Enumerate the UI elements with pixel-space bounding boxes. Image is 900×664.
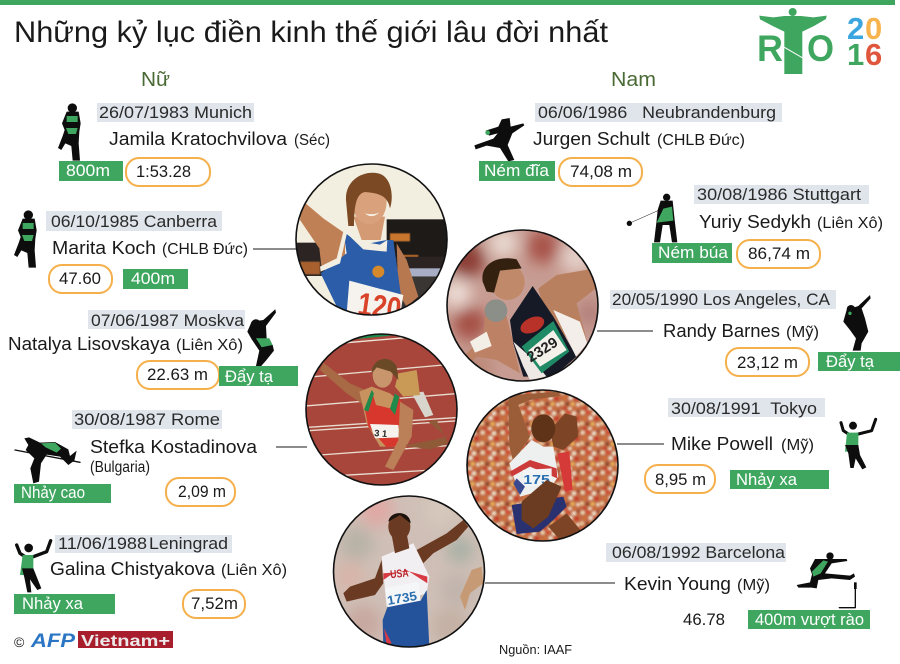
record: Mike Powell: (Mỹ): [781, 437, 814, 454]
letter O: O: [807, 28, 834, 69]
name: Natalya Lisovskaya: [8, 333, 171, 354]
date: [606, 543, 786, 562]
year 20: 0: [865, 11, 882, 46]
event tag: [652, 243, 732, 263]
photo ring: [334, 496, 484, 647]
record: Randy Barnes: [597, 290, 900, 376]
photo: Mike Powell: 175: [523, 473, 550, 487]
name: Jamila Kratochvilova: [109, 128, 288, 149]
heading: Nam: Nam: [611, 69, 656, 91]
name: Stefka Kostadinova: [90, 436, 258, 457]
logo: Vietnam+: [78, 631, 173, 650]
date: [72, 410, 222, 429]
record: Yuriy Sedykh: 30/08/1986 Stuttgart: [697, 185, 861, 204]
photo ring: [447, 230, 598, 381]
record: Galina Chistyakova: (Liên Xô): [221, 562, 287, 579]
event tag: [14, 484, 111, 503]
record: Stefka Kostadinova: 30/08/1987 Rome: [74, 410, 220, 429]
record: Natalya Lisovskaya: [8, 309, 298, 389]
result pill: [137, 361, 219, 389]
letter R: R: [757, 28, 783, 69]
event tag: [59, 161, 123, 181]
event tag: [219, 366, 298, 386]
year 16: [847, 37, 882, 72]
record: Jamila Kratochvilova: 800m: [66, 161, 110, 180]
record: Galina Chistyakova: 7,52m: [191, 594, 238, 613]
result pill: [126, 158, 210, 186]
record: Jurgen Schult: 74,08 m: [570, 162, 632, 181]
photo ring: [467, 390, 618, 541]
record: Mike Powell: [617, 398, 876, 493]
icon: runner: [14, 210, 37, 268]
photo: Kevin Young: USA: [390, 567, 409, 581]
record: Stefka Kostadinova: (Bulgaria): [90, 459, 150, 476]
logo: AFP: AFP: [30, 631, 75, 652]
photo: Mike Powell: [466, 389, 619, 542]
event tag: [123, 269, 188, 289]
heading: Nữ: Nữ: [141, 69, 170, 91]
year 20: 2: [847, 11, 864, 46]
record: Marita Koch: 47.60: [59, 269, 101, 288]
source: Nguồn: IAAF: [499, 643, 572, 657]
record: Natalya Lisovskaya: Đẩy tạ: [225, 367, 274, 386]
record: Natalya Lisovskaya: (Liên Xô): [176, 337, 243, 354]
photo ring: [296, 164, 447, 315]
name: Jurgen Schult: [533, 128, 650, 149]
record: Stefka Kostadinova: [14, 410, 307, 506]
name: Galina Chistyakova: [50, 558, 216, 579]
record: Kevin Young: (Mỹ): [737, 577, 770, 594]
date: [694, 185, 869, 204]
record: Randy Barnes: 20/05/1990 Los Angeles, CA: [612, 290, 831, 309]
result pill: [737, 240, 820, 268]
record: Jamila Kratochvilova: 1:53.28: [136, 162, 191, 181]
name: Randy Barnes: [663, 320, 780, 341]
name: Kevin Young: [624, 573, 731, 594]
record: Yuriy Sedykh: [627, 185, 883, 268]
record: Galina Chistyakova: Leningrad: [149, 534, 228, 553]
icon: Christ the Redeemer statue: [759, 8, 827, 74]
photo: Kevin Young: 1735: [386, 589, 418, 608]
photo: Randy Barnes: [442, 227, 603, 387]
name: Yuriy Sedykh: [699, 211, 811, 232]
record: Galina Chistyakova: Nhảy xa: [22, 594, 84, 613]
icon: shot put: [843, 295, 871, 351]
top bar: [0, 0, 895, 5]
title: Những kỷ lục điền kinh thế giới lâu đời nhất: [14, 16, 609, 49]
record: Yuriy Sedykh: (Liên Xô): [817, 215, 883, 232]
record: Yuriy Sedykh: Ném búa: [658, 243, 729, 262]
record: Galina Chistyakova: [14, 534, 287, 618]
photo: Jamila Kratochvilova: 120: [356, 285, 404, 327]
record: Marita Koch: [14, 210, 297, 293]
year 20: [847, 11, 882, 46]
record: Marita Koch: 06/10/1985 Canberra: [51, 212, 218, 231]
result pill: [726, 348, 809, 376]
photo: Jamila Kratochvilova: [295, 163, 448, 316]
record: Mike Powell: Nhảy xa: [736, 470, 798, 489]
record: Jurgen Schult: Ném đĩa: [484, 161, 550, 180]
record: Jurgen Schult: [474, 103, 782, 186]
result pill: [559, 158, 642, 186]
record: Marita Koch: (CHLB Đức): [162, 241, 248, 258]
record: Jamila Kratochvilova: (Séc): [294, 132, 330, 149]
icon: discus thrower: [474, 118, 524, 161]
event tag: [818, 352, 900, 371]
icon: hurdler: [797, 552, 857, 608]
date: [55, 535, 232, 553]
photo: Randy Barnes: 2329: [524, 335, 561, 366]
result pill: [183, 590, 245, 618]
record: Randy Barnes: Đẩy tạ: [826, 352, 875, 371]
record: Natalya Lisovskaya: 07/06/1987 Moskva: [91, 311, 245, 330]
photo: Kevin Young: [330, 493, 490, 653]
record: Jamila Kratochvilova: 26/07/1983 Munich: [99, 103, 252, 122]
record: Mike Powell: 8,95 m: [655, 470, 706, 489]
icon: hammer thrower: [627, 194, 677, 242]
record: Randy Barnes: (Mỹ): [786, 324, 819, 341]
logo: Rio 2016: [757, 8, 882, 74]
result pill: [166, 478, 235, 506]
photo ring: [306, 334, 457, 485]
record: Natalya Lisovskaya: 22.63 m: [147, 365, 208, 384]
result pill: [645, 465, 715, 493]
icon: long jumper: [841, 419, 876, 469]
event tag: [14, 594, 115, 614]
record: Stefka Kostadinova: Nhảy cao: [21, 483, 85, 502]
record: Kevin Young: 06/08/1992 Barcelona: [612, 543, 786, 562]
year 16: 1: [847, 37, 864, 72]
record: Stefka Kostadinova: 2,09 m: [178, 482, 226, 501]
record: Yuriy Sedykh: 86,74 m: [748, 244, 810, 263]
record: Kevin Young: 400m vượt rào: [755, 610, 864, 629]
result pill: [49, 265, 112, 293]
record: Jamila Kratochvilova: [58, 103, 330, 186]
logo: Vietnam+: Vietnam+: [81, 633, 170, 650]
icon: long jumper: [17, 541, 51, 592]
record: Marita Koch: 400m: [131, 269, 175, 288]
icon: shot put: [247, 309, 276, 367]
date: [46, 211, 222, 231]
record: Kevin Young: [485, 543, 870, 629]
icon: high jumper: [15, 437, 80, 483]
name: Mike Powell: [671, 433, 773, 454]
event tag: [479, 161, 555, 181]
date: [668, 398, 825, 417]
name: Marita Koch: [52, 237, 156, 258]
copyright mark: ©: [14, 634, 25, 650]
date: [97, 103, 254, 122]
event tag: [748, 610, 870, 629]
record: Galina Chistyakova: 11/06/1988: [58, 534, 147, 553]
event tag: [730, 470, 829, 489]
photo: Stefka Kostadinova: [305, 333, 458, 486]
date: [88, 310, 245, 329]
icon: runner: [58, 103, 81, 161]
date: [610, 290, 836, 309]
record: Mike Powell: 30/08/1991 Tokyo: [671, 399, 817, 418]
year 16: 6: [865, 37, 882, 72]
record: Jurgen Schult: (CHLB Đức): [657, 132, 745, 149]
record: Jurgen Schult: 06/06/1986 Neubrandenburg: [538, 103, 776, 122]
date: [535, 103, 782, 122]
photo: Stefka Kostadinova: 3 1: [374, 428, 388, 439]
result value: 46.78: [683, 610, 725, 629]
record: Randy Barnes: 23,12 m: [737, 353, 798, 372]
